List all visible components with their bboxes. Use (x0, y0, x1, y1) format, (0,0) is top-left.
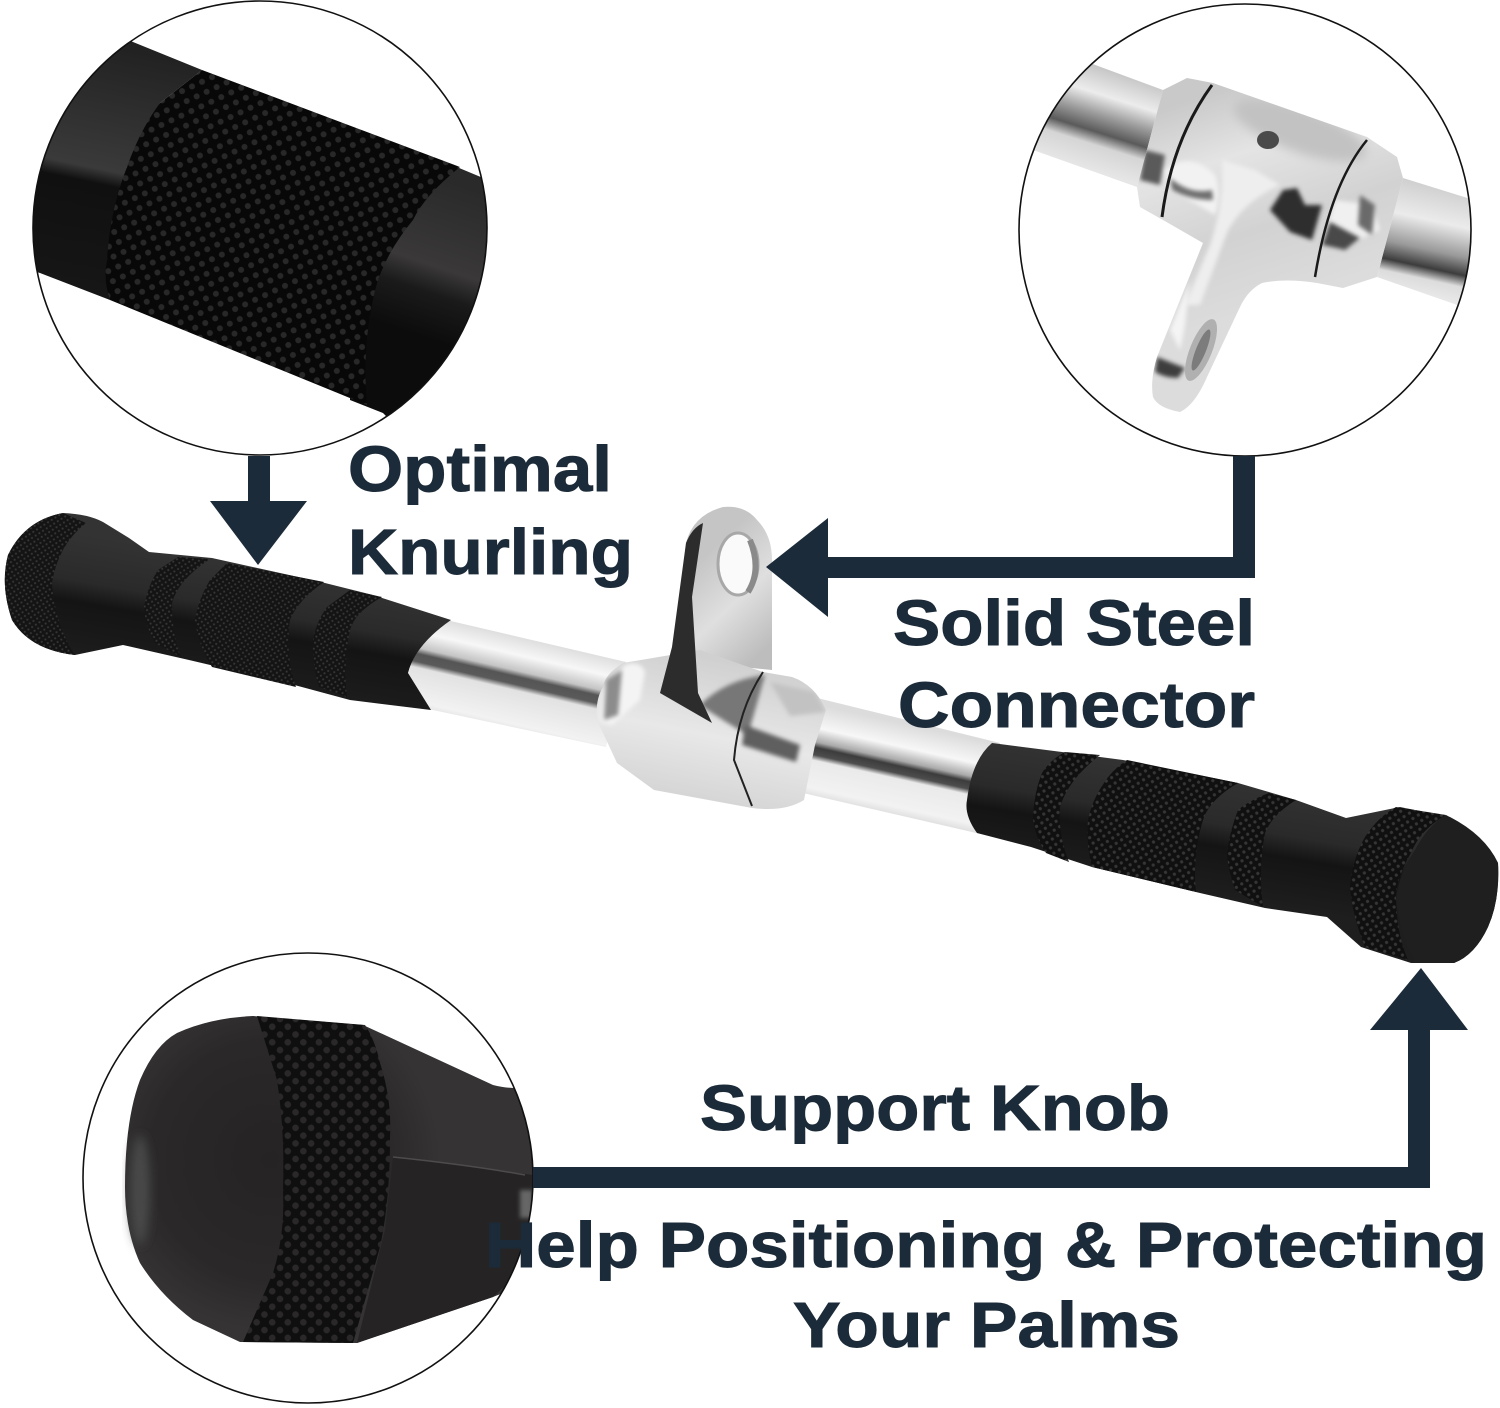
right grip (966, 743, 1498, 963)
label: positioning and palm protection: Your Palms (793, 1289, 1180, 1361)
label: solid steel connector (893, 587, 1255, 741)
dark tab edge (660, 523, 712, 723)
collar highlights (600, 664, 826, 762)
arrow: support knob pointer (533, 968, 1468, 1188)
arrow: knurling pointer (210, 456, 307, 565)
collar seam (734, 672, 763, 806)
panel: knurling close-up circle (0, 1, 500, 455)
right grip knurling (1033, 752, 1446, 960)
label: solid steel connector: Connector (898, 669, 1255, 741)
tab eye hole (718, 533, 758, 595)
right end cap (1396, 815, 1498, 963)
label: solid steel connector: Solid Steel (893, 587, 1255, 659)
label: optimal knurling: Optimal (348, 433, 612, 505)
right chrome shaft (790, 695, 1000, 835)
label: positioning and palm protection (485, 1209, 1487, 1361)
label: optimal knurling: Knurling (348, 516, 633, 588)
left chrome shaft (400, 615, 626, 747)
left grip knurling (5, 513, 382, 697)
swivel collar (597, 650, 826, 809)
connector tab (672, 507, 772, 670)
label: support knob: Support Knob (700, 1072, 1170, 1144)
label: positioning and palm protection: Help Positioning & Protecting (485, 1209, 1487, 1281)
arrow: connector pointer (766, 456, 1255, 617)
panel: support knob close-up circle (83, 953, 560, 1403)
main product: straight bar (5, 507, 1498, 963)
label: optimal knurling (348, 433, 633, 588)
left grip (5, 513, 451, 710)
panel: steel connector close-up circle (1000, 4, 1490, 456)
